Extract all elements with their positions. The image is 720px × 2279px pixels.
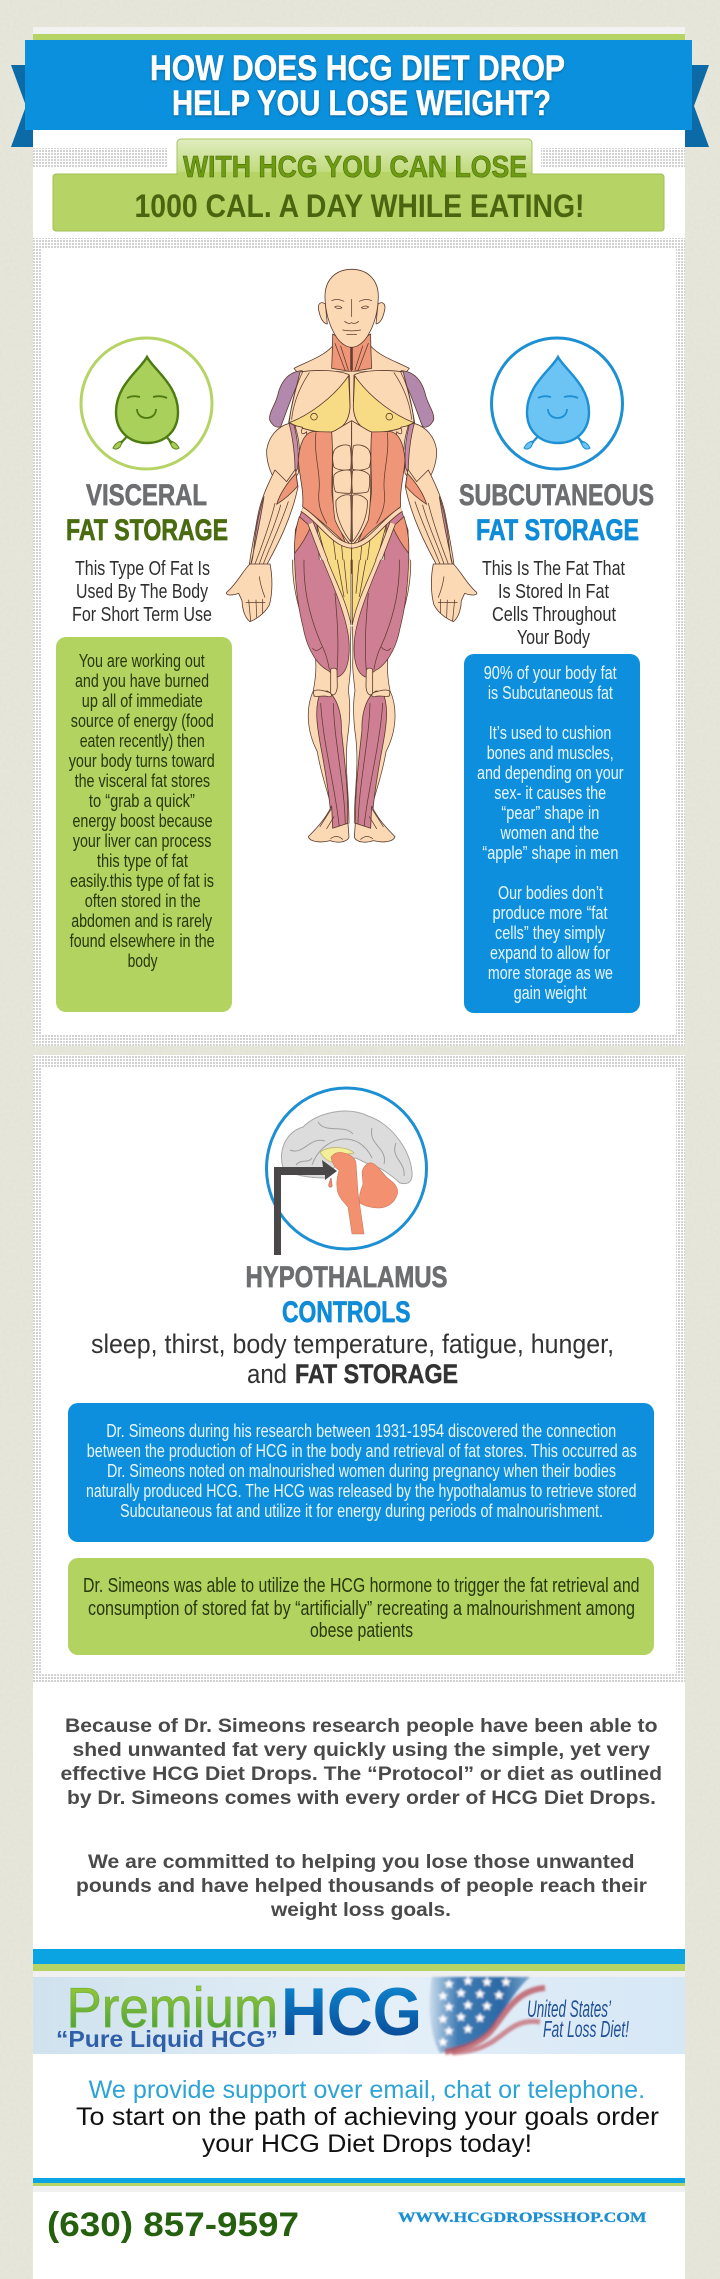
text: research results: effective HCG Diet Drops. The “Protocol” or diet as outlined [60,1764,662,1785]
callout: visceral explanation: easily.this type of fat is [70,871,214,891]
callout: lose 1000 cal: 1000 CAL. A DAY WHILE EATING! [134,188,584,224]
icon: subcutaneous fat drop [492,338,622,469]
forearm [249,469,298,565]
corpus [320,1148,354,1162]
leg skin [293,560,351,823]
logo text: Premium [66,1976,278,2040]
callout: subcutaneous explanation: cells” they simply [495,923,605,943]
text: visceral summary: For Short Term Use [72,604,212,626]
triceps strip [289,423,298,473]
thigh muscle [295,560,349,677]
shoulders [294,346,352,372]
text: visceral summary: Used By The Body [76,581,208,603]
callout: subcutaneous explanation: 90% of your body fat [484,663,617,683]
neck [332,334,352,372]
callout: visceral explanation: your liver can process [73,831,211,851]
title: HELP YOU LOSE WEIGHT? [172,84,551,123]
callout: lose 1000 cal [53,139,664,231]
callout: visceral explanation: this type of fat [97,851,188,871]
callout: subcutaneous explanation: more storage as we [488,963,613,983]
deltoid [270,371,303,427]
heading: hypothalamus controls: CONTROLS [282,1296,410,1329]
pectoral [289,370,350,432]
heading: hypothalamus controls [246,1261,448,1329]
text: support and call to action: your HCG Diet Drops today! [202,2130,532,2158]
hip purple [294,508,330,573]
icon: brain with arrow [266,1088,426,1255]
callout: subcutaneous explanation: is Subcutaneous fat [488,683,613,703]
callout: subcutaneous explanation: and depending on your [477,763,624,783]
text: research results: by Dr. Simeons comes with every order of HCG Diet Drops. [67,1788,656,1809]
header: title ribbon [11,27,709,147]
callout: visceral explanation [56,637,232,1012]
dotted bands beside tab [33,148,685,167]
text: subcutaneous summary: Your Body [517,627,590,649]
callout: subcutaneous explanation: gain weight [514,983,587,1003]
callout: subcutaneous explanation: “pear” shape in [501,803,599,823]
tagline: United States’ [527,1996,611,2023]
brain stem [331,1152,364,1234]
callout: subcutaneous explanation: It’s used to cushion [489,723,611,743]
text: commitment: weight loss goals. [270,1900,451,1921]
panel: fat storage types [33,238,685,1046]
tagline: Fat Loss Diet! [543,2016,629,2042]
text: controlled functions: sleep, thirst, body temperature, fatigue, hunger, [91,1329,614,1359]
foot [308,806,349,842]
callout: visceral explanation: and you have burned [75,671,209,691]
patella [331,668,337,695]
callout: visceral explanation: up all of immediate [82,691,203,711]
upper arm [267,423,299,505]
text: controlled functions: FAT STORAGE [295,1359,458,1389]
knee band [313,690,332,697]
callout: visceral explanation: abdomen and is rarely [71,911,212,931]
heading: subcutaneous fat storage: FAT STORAGE [476,514,639,547]
text: commitment: We are committed to helping you lose those unwanted [88,1852,634,1873]
banner: Premium HCG logo [33,1974,685,2054]
text: visceral summary: This Type Of Fat Is [75,558,210,580]
figure: human muscle body [226,269,477,842]
logo text [56,1974,422,2052]
callout: subcutaneous explanation: sex- it causes the [494,783,606,803]
upper body [249,269,454,573]
heading: visceral fat storage: FAT STORAGE [66,514,228,547]
website: WWW.HCGDROPSSHOP.COM [398,2210,646,2226]
heading: visceral fat storage: VISCERAL [86,479,207,512]
head [325,269,378,347]
text: subcutaneous summary: Cells Throughout [492,604,616,626]
icon: american flag [425,1976,545,2054]
text: subcutaneous summary [482,558,625,649]
torso base [300,372,352,547]
text: support and call to action: We provide support over email, chat or telephone. [89,2076,645,2104]
footer divider [33,2178,685,2192]
phone number: (630) 857-9597 [47,2206,299,2244]
text: research results [60,1716,662,1809]
callout: visceral explanation: source of energy (food [71,711,214,731]
heading: hypothalamus controls: HYPOTHALAMUS [246,1261,448,1294]
inner yellow [327,560,351,625]
text: research results: shed unwanted fat very quickly using the simple, yet very [72,1740,650,1761]
text: subcutaneous summary: Is Stored In Fat [498,581,609,603]
callout: subcutaneous explanation: bones and muscles, [487,743,614,763]
heading: subcutaneous fat storage [459,479,654,547]
callout: subcutaneous explanation: expand to allow for [490,943,610,963]
callout: Dr. Simeons research: Subcutaneous fat and utilize it for energy during periods of malnourishment. [120,1501,603,1521]
logo text: “Pure Liquid HCG” [56,2026,278,2052]
shin muscle [317,691,348,828]
text: subcutaneous summary: This Is The Fat That [482,558,625,580]
callout: visceral explanation: eaten recently) then [80,731,205,751]
text: support and call to action: To start on the path of achieving your goals order [76,2103,659,2131]
callout: subcutaneous explanation [464,654,640,1013]
callout: visceral explanation: body [128,951,158,971]
heading: visceral fat storage [66,479,228,547]
callout: visceral explanation: energy boost because [72,811,212,831]
callout: subcutaneous explanation: women and the [500,823,599,843]
face [332,299,372,334]
callout: subcutaneous explanation: Our bodies don’t [498,883,603,903]
callout: lose 1000 cal: WITH HCG YOU CAN LOSE [183,149,527,184]
arrow [274,1160,337,1255]
text: controlled functions [91,1329,614,1389]
callout: Dr. Simeons research [68,1403,654,1542]
text: controlled functions: and [247,1359,287,1389]
text: research results: Because of Dr. Simeons research people have been able to [65,1716,658,1737]
callout: visceral explanation: often stored in the [85,891,201,911]
callout: subcutaneous explanation: produce more “fat [492,903,608,923]
waist band [302,509,352,546]
callout: subcutaneous explanation: “apple” shape in men [482,843,618,863]
title [150,49,565,123]
callout: visceral explanation: You are working out [79,651,205,671]
callout: visceral explanation: your body turns toward [69,751,215,771]
text: visceral summary [72,558,212,626]
abs [332,421,352,545]
text: support and call to action [76,2076,659,2158]
groin yellow [317,523,352,573]
hand [226,564,272,622]
icon: visceral fat drop [81,338,212,469]
callout: artificial malnourishment [68,1558,654,1655]
ribbon tails [11,65,709,147]
heading: subcutaneous fat storage: SUBCUTANEOUS [459,479,654,512]
callout: visceral explanation: found elsewhere in the [70,931,215,951]
divider bars [33,1949,685,1977]
text: commitment [76,1852,648,1921]
title: HOW DOES HCG DIET DROP [150,49,565,88]
hip skin stripe [311,523,325,562]
serratus [295,426,307,450]
tagline [527,1996,629,2042]
oblique [298,432,346,544]
panel: hypothalamus [33,1055,685,1683]
callout: visceral explanation: to “grab a quick” [89,791,195,811]
lower body [226,560,477,842]
ear [318,303,327,324]
cerebellum [359,1163,398,1208]
callout: visceral explanation: the visceral fat stores [75,771,210,791]
callout: artificial malnourishment: obese patients [310,1620,413,1642]
brain [282,1111,412,1184]
logo text: HCG [281,1974,422,2050]
text: commitment: pounds and have helped thousands of people reach their [76,1876,648,1897]
